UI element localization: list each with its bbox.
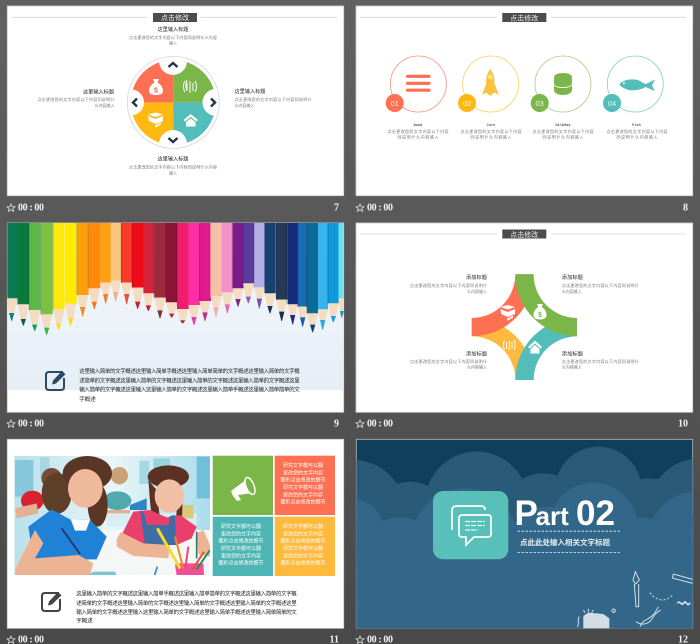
tile: teal text [213, 517, 273, 576]
tile: teal text: 更改您的文字内容 [221, 530, 261, 537]
photo: pencil row [7, 223, 344, 335]
bottom text block: 这里输入标题 [158, 155, 188, 163]
item: oil and gas: 同说明什么内容输入 [542, 133, 584, 139]
left text block: 这里输入标题 [83, 88, 114, 96]
left text block: 么内容输入 [94, 102, 114, 108]
icon: house [184, 114, 198, 126]
slide 8 heading: 点击修改 [510, 14, 538, 22]
lower left text: 添加标题 [466, 349, 487, 357]
item: fish: Fish [632, 123, 641, 128]
wheel diagram [127, 56, 220, 149]
right text block: 点击更改您的文字内容以下内容同说明什 [234, 96, 312, 102]
item: oil and gas: 点击更改您的文字内容以下内容 [532, 128, 594, 134]
lower left text: 么内容输入 [467, 363, 487, 369]
tile: yellow text: 更改您的文字内容 [283, 552, 323, 559]
upper left text: 添加标题 [466, 273, 487, 281]
item: fish: 04 [608, 99, 616, 108]
slide 12 footer [356, 634, 688, 644]
title: Part 02: P [514, 494, 538, 533]
slide 9 footer: 9 [334, 418, 339, 430]
slide 10 footer: 00 : 00 [367, 418, 393, 430]
item: wood: 点击更改您的文字内容以下内容 [388, 128, 448, 134]
left text block: 点击更改您的文字内容以下内容同说明什 [38, 96, 114, 102]
panel: slide 9 coloured pencils [6, 222, 344, 428]
top text block [129, 25, 217, 46]
left text block [38, 88, 114, 108]
panel: slide 10 pinwheel [356, 223, 693, 430]
tile: yellow text: 图形点击修改的细节 [280, 560, 326, 567]
bottom text block: 点击更改您的文字内容以下内容同说明什么内容 [129, 163, 217, 169]
item: fish [603, 56, 668, 139]
slide 10 heading: 点击修改 [510, 230, 538, 239]
icon: box [500, 305, 515, 320]
tile: teal text: 研究文字都可以翻 [221, 545, 261, 552]
slide 7 heading: 点击修改 [161, 13, 189, 22]
slide 10 footer: 10 [678, 418, 688, 430]
tile: yellow text: 图形点击修改的细节 [280, 538, 326, 545]
tile: orange text [275, 456, 335, 515]
slide 7 footer: 00 : 00 [18, 202, 44, 214]
tile: teal text: 更改您的文字内容 [221, 552, 261, 559]
top text block: 这里输入标题 [158, 25, 188, 33]
slide 7 footer [7, 202, 339, 214]
body text: 字概述 [79, 395, 96, 403]
tile: orange text: 图形点击修改的细节 [280, 477, 326, 484]
item: wood: 同说明什么内容输入 [398, 133, 438, 139]
tile: megaphone [213, 456, 273, 515]
paper backdrop [7, 223, 344, 390]
body text: 述简单的文字概述这里输入简单的文字概述这里输入简单的文字概述这里输入简单的文字概述这里 [79, 376, 300, 384]
tile: yellow text: 更改您的文字内容 [283, 530, 323, 537]
body text: 字概述 [76, 617, 93, 625]
top text block: 点击更改您的文字内容以下内容同说明什么内容 [129, 34, 217, 40]
upper left text [410, 273, 487, 294]
upper right text: 点击更改您的文字内容以下内容同说明什 [562, 282, 639, 288]
tile: teal text: 研究文字都可以翻 [221, 523, 261, 530]
right text block: 么内容输入 [234, 102, 254, 108]
body text: 这里输入简单的文字概述这里输入简单手概述这里输入简单简单的文字概述这里输入简单的文字概 [76, 590, 297, 598]
icon: signal [503, 340, 515, 350]
item: fish: 点击更改您的文字内容以下内容 [606, 128, 668, 134]
doodle: notebook [583, 613, 609, 628]
item: corn: 02 [463, 99, 471, 108]
pinwheel diagram [472, 274, 577, 380]
panel: slide 11 photo and tiles [7, 439, 344, 644]
slide 9 footer [7, 418, 339, 430]
title: Part 02: 02 [576, 494, 615, 533]
title: Part 02: art [536, 501, 569, 531]
tile: teal text: 图形点击修改的细节 [218, 560, 264, 567]
item: fish: 同说明什么内容输入 [616, 133, 658, 139]
slide 8 footer [356, 202, 688, 214]
icon: house [528, 340, 542, 354]
body text: 述简单的文字概述这里输入简单的文字概述这里输入简单的文字概述这里输入简单的文字概述这里 [76, 599, 297, 607]
subtitle with dashed rules: 点此此处输入相关文字标题 [520, 537, 610, 547]
bottom text block [129, 155, 217, 175]
slide 8 footer: 8 [683, 202, 688, 214]
body text: 输入简单的文字概述这里输入这里输入简单的文字概述这里输入简单手概述这里输入简单简单的文 [79, 386, 300, 394]
tile: orange text: 研究文字都可以翻 [283, 462, 323, 469]
item: corn [458, 56, 522, 139]
item: wood [386, 56, 448, 139]
upper left text: 么内容输入 [467, 288, 487, 294]
right text block [234, 87, 312, 108]
upper right text: 添加标题 [562, 273, 583, 281]
slide 11 footer [7, 634, 339, 644]
bottom text block: 输入 [169, 169, 177, 175]
photo: girls drawing [14, 456, 210, 575]
tile: orange text: 图形点击修改的细节 [280, 499, 326, 506]
item: oil and gas: Oil&Gas [555, 123, 571, 128]
cloud backdrop [356, 446, 693, 628]
slide 8 footer: 00 : 00 [367, 202, 393, 214]
lower right text: 点击更改您的文字内容以下内容同说明什 [562, 358, 639, 364]
slide 9 footer: 00 : 00 [18, 418, 44, 430]
icon: edit note [46, 371, 66, 390]
icon: speech bubbles tile [433, 491, 508, 559]
tile: yellow text [275, 517, 335, 576]
item: oil and gas: 03 [536, 99, 544, 108]
item: corn: 点击更改您的文字内容以下内容 [460, 128, 522, 134]
title: Part 02 [514, 494, 615, 533]
upper left text: 点击更改您的文字内容以下内容同说明什 [410, 282, 487, 288]
subtitle with dashed rules [518, 531, 620, 552]
icon: money bag: $ [538, 312, 542, 319]
top text block: 输入 [169, 40, 177, 46]
doodles: school supplies [577, 572, 693, 627]
item: corn: 同说明什么内容输入 [470, 133, 512, 139]
panel: slide 7 wheel [7, 6, 344, 214]
upper right text [562, 273, 639, 294]
body text: 这里输入简单的文字概述这里输入简单手概述这里输入简单简单的文字概述这里输入简单的文字概 [79, 367, 300, 375]
slide 10 heading [360, 230, 686, 239]
tile: orange text: 更改您的文字内容 [283, 469, 323, 476]
icon: money bag: $ [154, 86, 159, 94]
icon: signal [184, 80, 196, 93]
item: wood: 01 [391, 99, 399, 108]
right text block: 这里输入标题 [234, 87, 266, 95]
slide 10 footer [356, 418, 688, 430]
item: oil and gas [531, 56, 594, 139]
slide 8 heading [360, 13, 686, 22]
panel: slide 8 four circles [356, 6, 693, 214]
body text [76, 590, 297, 625]
lower left text [410, 349, 487, 369]
tile: orange text: 研究文字都可以翻 [283, 484, 323, 491]
slide 7 footer: 7 [334, 202, 339, 214]
tile: yellow text: 研究文字都可以翻 [283, 545, 323, 552]
panel: slide 12 section cover [355, 438, 694, 644]
item: corn: Corn [487, 123, 495, 128]
item: wood: Wood [414, 123, 422, 128]
tile: yellow text: 研究文字都可以翻 [283, 523, 323, 530]
tile: teal text: 图形点击修改的细节 [218, 538, 264, 545]
upper right text: 么内容输入 [562, 288, 582, 294]
body text: 输入简单的文字概述这里输入这里输入简单的文字概述这里输入简单手概述这里输入简单简单的文 [76, 608, 297, 616]
lower right text: 添加标题 [562, 349, 583, 357]
body text [79, 367, 300, 403]
lower left text: 点击更改您的文字内容以下内容同说明什 [410, 358, 487, 364]
icon: chevrons [133, 63, 215, 142]
tile: orange text: 更改您的文字内容 [283, 491, 323, 498]
icon: box [148, 112, 163, 128]
slide 7 heading [11, 13, 337, 22]
lower right text: 么内容输入 [562, 363, 582, 369]
lower right text [562, 349, 639, 369]
icon: edit note [42, 592, 62, 611]
